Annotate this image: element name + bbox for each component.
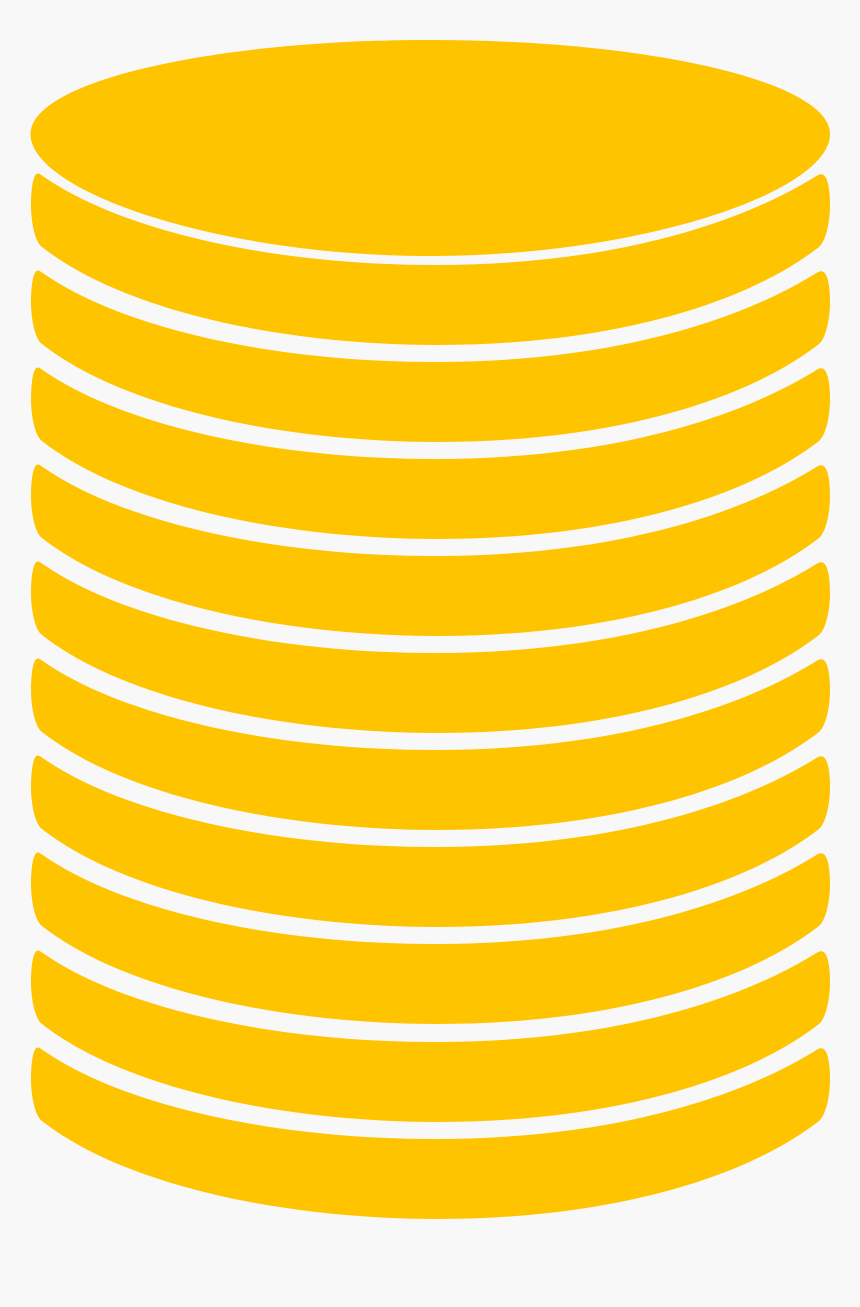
coin 4 [31,464,830,636]
coin 7 [31,755,830,927]
top coin face [30,40,830,256]
coin 6 [31,658,830,830]
coin 8 [31,852,830,1024]
coin 10 (bottom) [31,1047,830,1219]
coin 3 [31,367,830,539]
coin 5 [31,561,830,733]
coin 9 [31,950,830,1122]
coin 2 [31,270,830,442]
coin 1 [31,173,830,345]
